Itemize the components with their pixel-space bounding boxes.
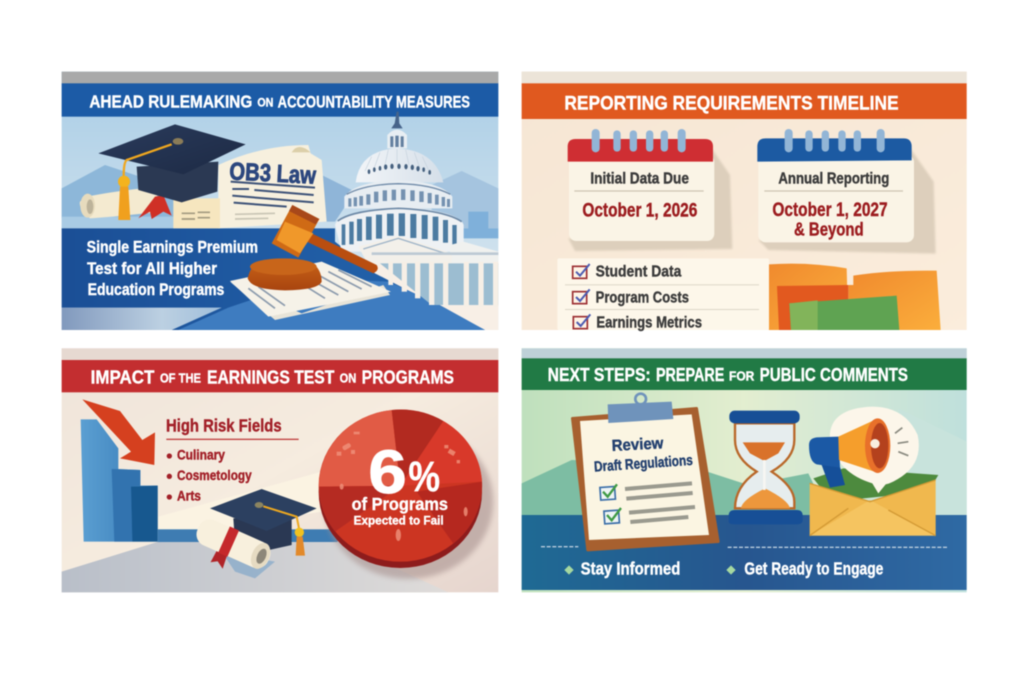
checklist bbox=[557, 258, 769, 331]
label: OB3 Law: OB3 Law bbox=[229, 158, 317, 190]
heading: reporting requirements timeline bbox=[522, 83, 967, 119]
panel: reporting requirements timeline bbox=[522, 72, 967, 331]
chart: 6 percent pie bbox=[319, 410, 493, 579]
heading: AHEAD rulemaking: AHEAD RULEMAKING bbox=[89, 92, 252, 112]
chart: 6 percent pie: Expected to Fail bbox=[354, 513, 444, 527]
calendar: annual reporting: October 1, 2027 bbox=[772, 200, 888, 221]
icon: red down arrow bbox=[82, 399, 155, 465]
checkbox: program costs: Program Costs bbox=[596, 290, 689, 307]
heading: next steps: NEXT STEPS: bbox=[548, 364, 651, 385]
icon: capitol building bbox=[335, 112, 498, 307]
heading: next steps bbox=[522, 358, 967, 390]
text: high risk fields: Culinary bbox=[177, 448, 225, 463]
icon: graduation cap and diploma bbox=[186, 489, 317, 586]
icon: graduation cap bbox=[98, 124, 246, 220]
calendar: initial data due bbox=[568, 129, 732, 251]
panel: next steps bbox=[522, 348, 967, 592]
icon: papers bbox=[230, 262, 391, 320]
calendar: initial data due: Initial Data Due bbox=[590, 171, 689, 188]
icon: megaphone bbox=[809, 407, 919, 493]
calendar: annual reporting bbox=[757, 129, 936, 254]
text: single earnings premium bbox=[87, 237, 258, 299]
icon: OB3 law document bbox=[173, 145, 327, 228]
text: single earnings premium: Education Programs bbox=[88, 280, 224, 299]
heading: impact of the earnings test: EARNINGS TEST bbox=[207, 367, 335, 388]
bar chart: declining bars bbox=[81, 419, 338, 542]
icon: envelope bbox=[810, 468, 938, 536]
icon: clipboard: Draft Regulations bbox=[593, 453, 693, 476]
heading: impact of the earnings test: OF THE bbox=[160, 372, 201, 386]
icon: gavel bbox=[248, 205, 378, 290]
value: 6%: 6 bbox=[368, 438, 407, 507]
heading: next steps: FOR bbox=[729, 369, 754, 383]
floor band bbox=[62, 228, 498, 330]
text: high risk fields bbox=[166, 416, 299, 504]
panel: impact of the earnings test bbox=[62, 348, 498, 592]
text: high risk fields: Arts bbox=[177, 489, 201, 504]
heading: AHEAD rulemaking: ACCOUNTABILITY MEASURES bbox=[278, 92, 470, 111]
checkbox: student data: Student Data bbox=[596, 264, 681, 281]
icon: diploma scroll bbox=[80, 188, 172, 219]
text: high risk fields: Cosmetology bbox=[177, 468, 252, 483]
heading: impact of the earnings test: IMPACT bbox=[91, 367, 155, 388]
icon: folders bbox=[769, 264, 941, 330]
icon: hourglass bbox=[729, 411, 803, 524]
checkbox: earnings metrics bbox=[573, 314, 702, 331]
heading: impact of the earnings test bbox=[62, 360, 498, 392]
checkbox: program costs bbox=[573, 289, 689, 307]
text: high risk fields: High Risk Fields bbox=[166, 416, 282, 436]
chart: 6 percent pie: of Programs bbox=[352, 494, 448, 514]
checkbox: earnings metrics: Earnings Metrics bbox=[596, 314, 702, 331]
calendar: annual reporting: Annual Reporting bbox=[778, 171, 889, 188]
panel: AHEAD rulemaking bbox=[62, 72, 498, 330]
calendar: initial data due: October 1, 2026 bbox=[582, 201, 697, 222]
heading: AHEAD rulemaking: ON bbox=[257, 96, 273, 110]
text: get ready to engage: Get Ready to Engage bbox=[744, 558, 884, 578]
heading: reporting requirements timeline: REPORTING REQUIREMENTS TIMELINE bbox=[564, 92, 899, 114]
heading: impact of the earnings test: ON bbox=[340, 372, 356, 386]
text: review draft regulations: Review bbox=[611, 435, 664, 455]
text: single earnings premium: Single Earnings Premium bbox=[87, 237, 258, 256]
heading: next steps: PREPARE bbox=[656, 364, 724, 385]
chart: 6 percent pie: % bbox=[408, 453, 440, 501]
heading: impact of the earnings test: PROGRAMS bbox=[362, 367, 454, 388]
text: single earnings premium: Test for All Higher bbox=[87, 259, 217, 278]
text: stay informed: Stay Informed bbox=[581, 558, 680, 578]
heading: AHEAD rulemaking bbox=[62, 83, 498, 117]
calendar: annual reporting: & Beyond bbox=[794, 218, 864, 239]
band: lower blue bbox=[522, 515, 967, 590]
heading: next steps: PUBLIC COMMENTS bbox=[760, 364, 908, 385]
icon: clipboard bbox=[572, 394, 718, 550]
